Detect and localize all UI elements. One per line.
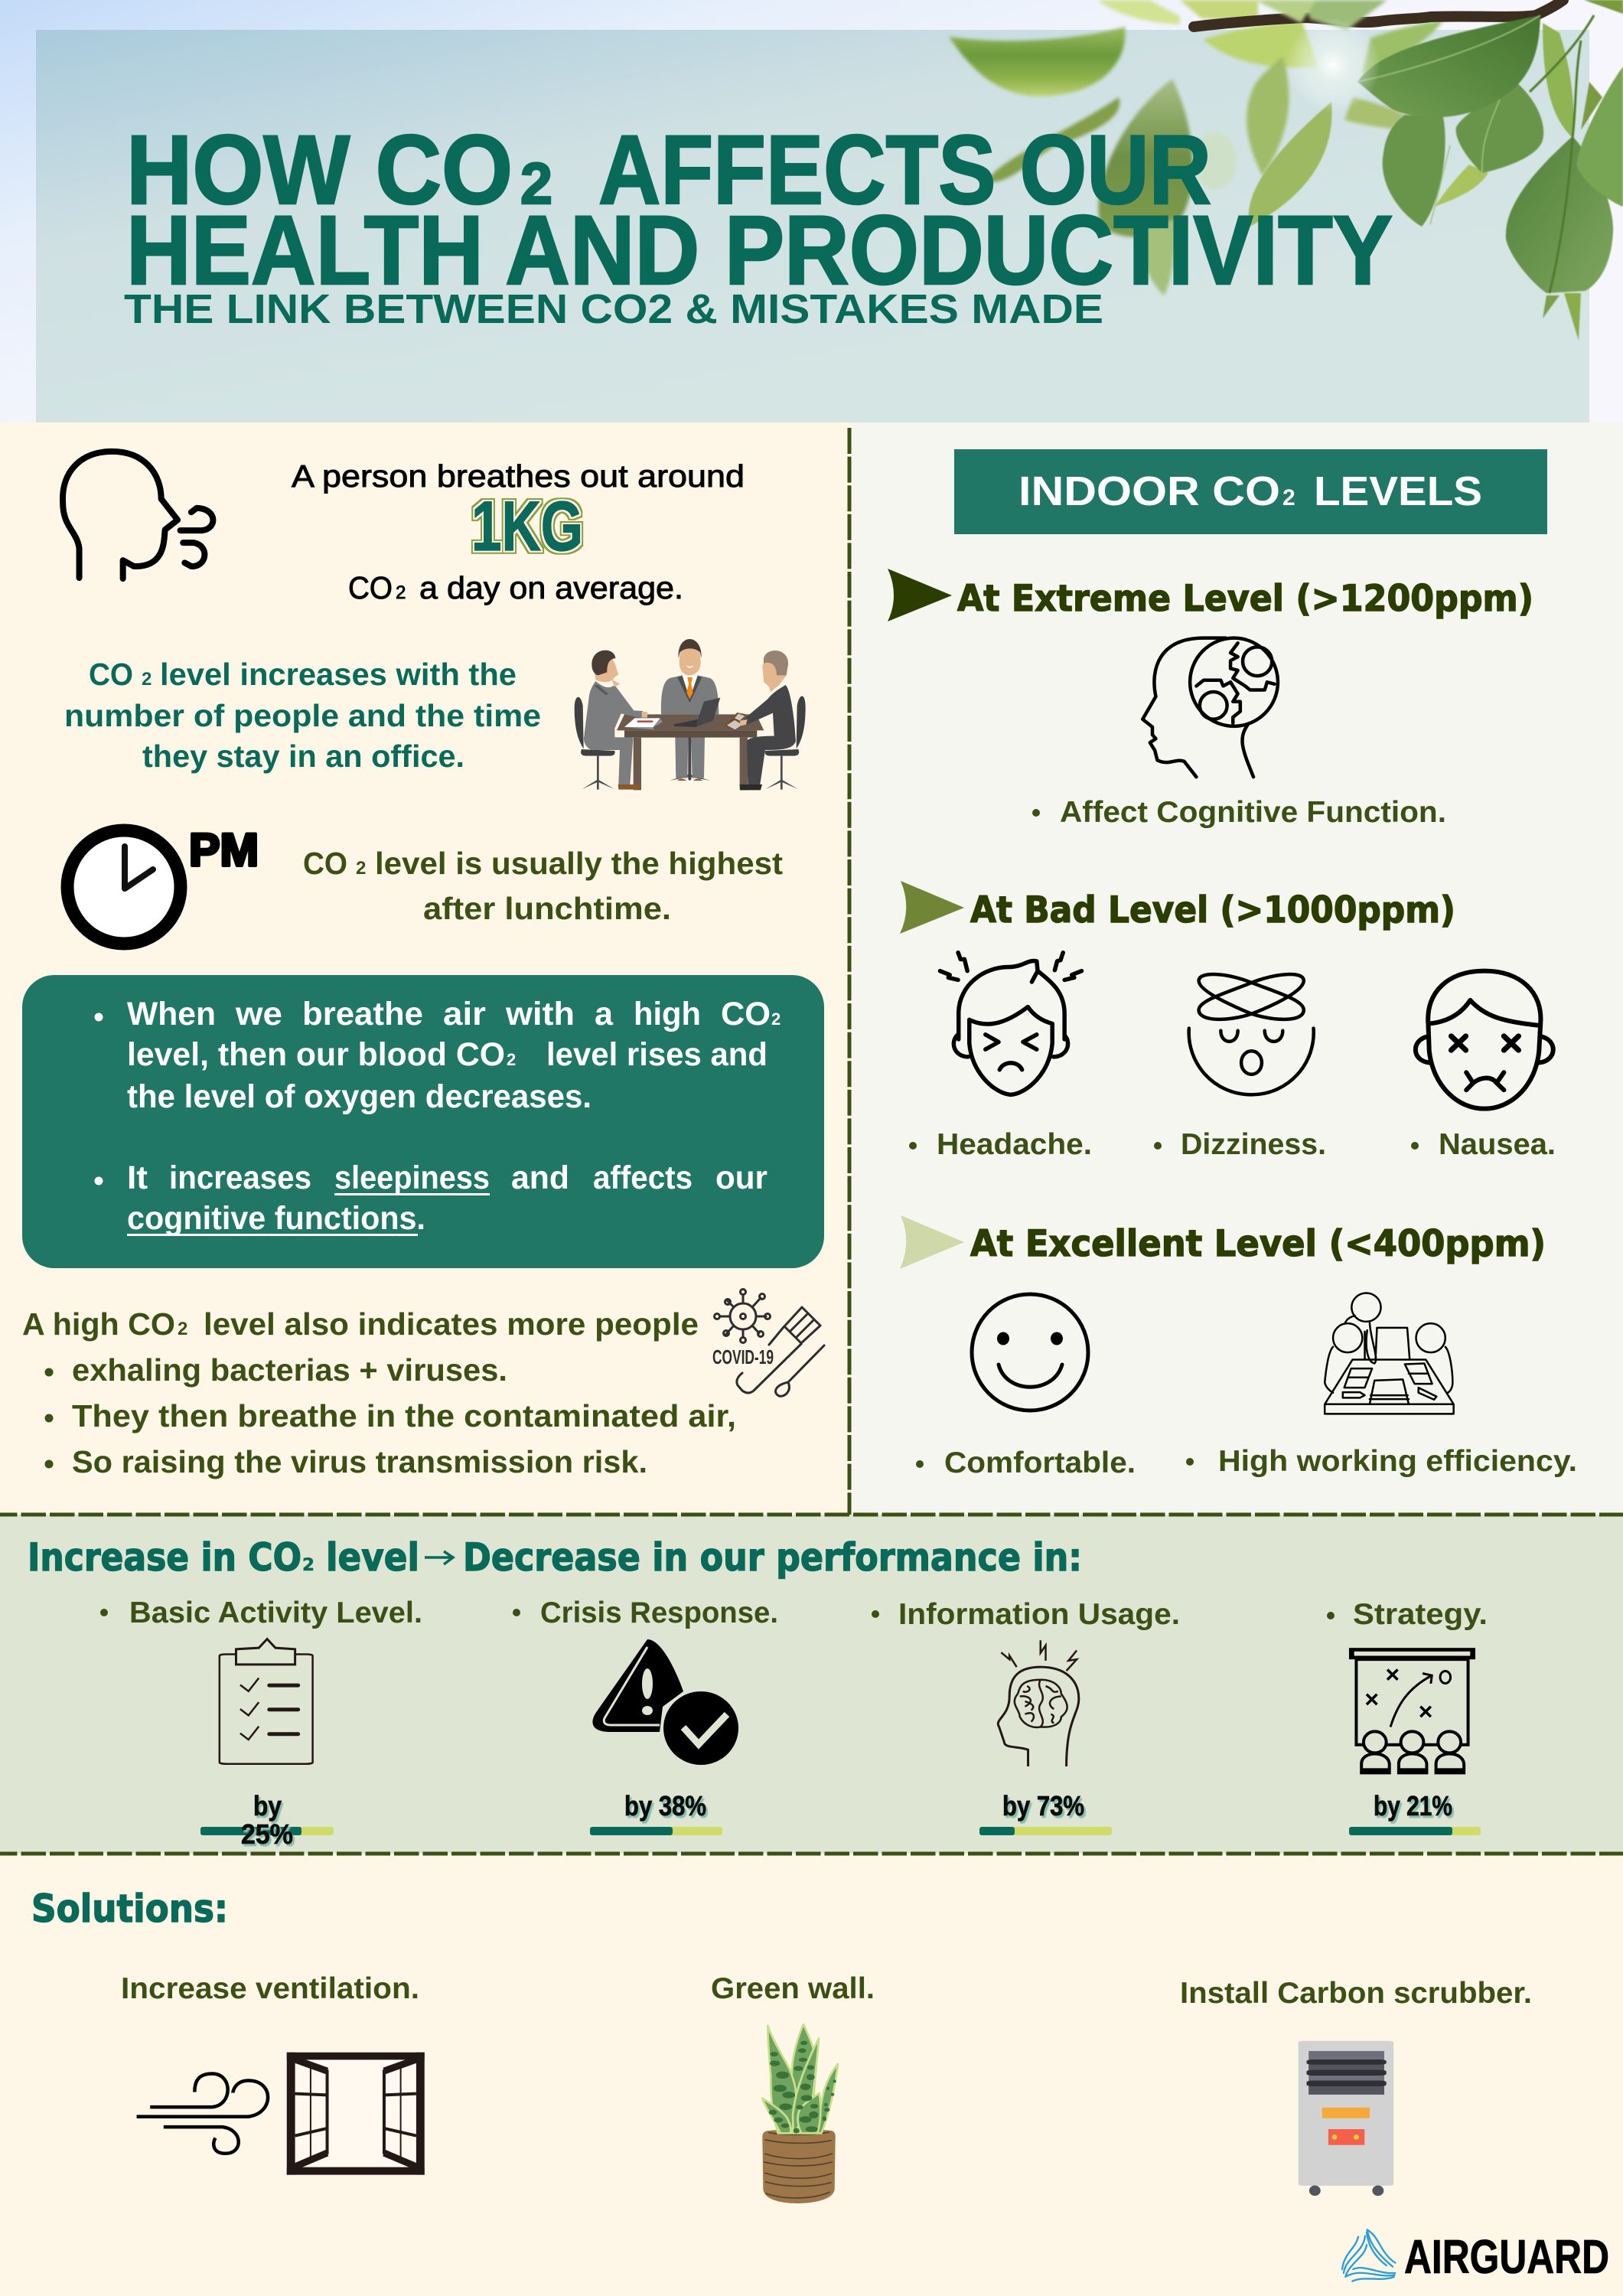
text: virus transmission: level also indicates more people	[204, 1306, 699, 1342]
callout: blood CO2 effects: air	[443, 996, 486, 1032]
labels: bad level symptoms: Dizziness.	[1181, 1128, 1326, 1161]
panel: left column facts	[0, 422, 849, 1515]
icon: head with gears	[1142, 638, 1278, 777]
bar: 73%	[979, 1790, 1112, 1835]
bar: 25%: by	[253, 1790, 282, 1821]
callout: blood CO2 effects: increases	[169, 1159, 311, 1196]
icon: covid-19 virus and swab: COVID-19	[712, 1345, 774, 1368]
panel: solutions	[0, 1856, 1623, 2296]
callout: blood CO2 effects: affects	[593, 1159, 693, 1196]
heading: extreme level: At Extreme Level (>1200ppm)	[957, 578, 1533, 620]
bar: 21%: by 21%	[1374, 1790, 1452, 1821]
text: virus transmission: So raising the virus transmission risk.	[72, 1444, 647, 1479]
callout: blood CO2 effects: CO	[721, 996, 771, 1032]
solution: increase ventilation: Increase ventilation.	[121, 1972, 419, 2005]
heading: indoor CO2 levels: INDOOR CO	[1018, 468, 1280, 514]
solution: carbon scrubber: Install Carbon scrubber.	[1180, 1977, 1532, 2010]
text: virus transmission: They then breathe in the contaminated air,	[72, 1398, 736, 1433]
text: highest after lunchtime: after lunchtime.	[423, 891, 671, 926]
title: HEALTH AND PRODUCTIVITY	[126, 196, 1393, 305]
bar: 38%: by 38%	[624, 1790, 706, 1821]
bar: 25%	[200, 1790, 334, 1850]
solution: carbon scrubber	[1180, 1977, 1532, 2196]
arrow: bad level	[900, 881, 964, 934]
illustration: three people meeting	[575, 639, 806, 790]
callout: blood CO2 effects: cognitive functions.	[127, 1200, 425, 1237]
text: level increases with people: they stay in an office.	[142, 739, 464, 774]
image: leafy branch	[949, 0, 1623, 341]
panel: performance decrease	[0, 1515, 1623, 1854]
callout: blood CO2 effects: our	[715, 1159, 768, 1196]
icon: smiley	[972, 1294, 1088, 1411]
solution: green wall: Green wall.	[711, 1972, 875, 2005]
icon: open window with wind	[137, 2053, 425, 2175]
icon: clock with PM: PM	[189, 824, 259, 876]
heading: increase in CO2 level: Decrease in our performance in:	[463, 1535, 1082, 1580]
title: AFFECTS OUR	[598, 116, 1211, 225]
callout: blood CO2 effects: we	[235, 996, 282, 1032]
heading: increase in CO2 level: Increase in CO	[28, 1535, 301, 1580]
bar: 21%	[1349, 1790, 1481, 1835]
icon: clock with PM	[67, 824, 259, 944]
icon: head breathing out	[63, 452, 213, 579]
text: level increases with people: 2	[142, 669, 152, 690]
figure: 1KG: 1KG	[471, 488, 583, 566]
callout: blood CO2 effects: sleepiness	[334, 1159, 490, 1196]
arrow: extreme level	[888, 569, 952, 621]
text: highest after lunchtime: level is usually the highest	[375, 846, 783, 881]
item: strategy	[1327, 1598, 1488, 1835]
icon: dizziness	[1189, 974, 1314, 1094]
callout: blood CO2 effects: the level of oxygen decreases.	[127, 1078, 592, 1115]
text: highest after lunchtime: CO	[303, 846, 347, 881]
callout: blood CO2 effects: level, then our blood CO	[127, 1036, 505, 1073]
callout: blood CO2 effects: with	[505, 996, 575, 1032]
icon: head with brain and lightning	[998, 1640, 1079, 1766]
callout: blood CO2 effects: It	[127, 1159, 148, 1196]
text: level increases with people: CO	[89, 657, 133, 692]
bar: 38%	[590, 1790, 722, 1835]
callout: blood CO2 effects: When	[127, 996, 216, 1032]
item: crisis response: Crisis Response.	[540, 1596, 778, 1629]
text: level increases with people	[64, 657, 541, 774]
right man	[744, 685, 796, 784]
text: virus transmission: A high CO	[22, 1306, 175, 1342]
text: virus transmission: exhaling bacterias + viruses.	[72, 1352, 507, 1388]
text: person breathes out: A person breathes out around	[292, 458, 745, 494]
text: level increases with people: number of people and the time	[64, 698, 541, 733]
callout: blood CO2 effects: 2	[771, 1009, 781, 1029]
item: basic activity level	[100, 1596, 422, 1850]
bar: 25%: 25%	[241, 1818, 293, 1850]
left man	[584, 681, 643, 784]
solution: increase ventilation	[121, 1972, 425, 2175]
text: person breathes out: 2	[396, 582, 406, 603]
icon: potted snake plant	[762, 2024, 838, 2203]
subtitle: THE LINK BETWEEN CO2 & MISTAKES MADE	[124, 286, 1103, 332]
callout: blood CO2 effects: 2	[507, 1050, 516, 1069]
text: virus transmission: 2	[178, 1319, 187, 1339]
callout: blood CO2 effects: level rises and	[546, 1036, 768, 1073]
callout: blood CO2 effects: high	[634, 996, 701, 1032]
callout: blood CO2 effects: breathe	[302, 996, 423, 1032]
icon: headache	[940, 953, 1081, 1094]
icon: nausea	[1416, 971, 1553, 1109]
heading: increase in CO2 level: 2	[302, 1556, 314, 1575]
text: person breathes out: CO	[348, 570, 393, 605]
labels: excellent level benefits: High working efficiency.	[1218, 1445, 1577, 1478]
text: virus transmission	[22, 1306, 736, 1479]
title	[126, 116, 1393, 305]
text: person breathes out: a day on average.	[419, 570, 683, 605]
labels: excellent level benefits	[916, 1445, 1577, 1479]
heading: increase in CO2 level: level	[326, 1535, 419, 1580]
heading: indoor CO2 levels: LEVELS	[1314, 468, 1482, 514]
panel: indoor CO2 levels	[852, 422, 1623, 1515]
text: person breathes out	[292, 458, 745, 605]
laptop, paper, tablet	[695, 698, 720, 727]
callout: blood CO2 effects: a	[595, 996, 614, 1032]
icon: warning with check	[592, 1639, 738, 1765]
item: information usage: Information Usage.	[898, 1598, 1180, 1631]
labels: bad level symptoms: Headache.	[937, 1128, 1092, 1161]
item: strategy: Strategy.	[1353, 1598, 1488, 1631]
centre man	[661, 675, 719, 714]
heading: bad level: At Bad Level (>1000ppm)	[970, 889, 1455, 931]
heading: excellent level: At Excellent Level (<400ppm)	[970, 1223, 1546, 1265]
text: highest after lunchtime: 2	[356, 858, 366, 879]
icon: clipboard checklist	[220, 1639, 313, 1764]
title: 2	[520, 152, 552, 217]
icon: scrubber unit	[1299, 2041, 1393, 2196]
title: HOW CO	[126, 116, 513, 225]
label: affect cognitive function: Affect Cognitive Function.	[1060, 796, 1446, 829]
callout: blood CO2 effects	[22, 975, 824, 1268]
table	[617, 714, 764, 730]
text: level increases with people: level increases with the	[160, 657, 517, 692]
heading: increase in CO2 level	[28, 1535, 1082, 1580]
heading: indoor CO2 levels	[954, 449, 1547, 534]
labels: bad level symptoms	[909, 1128, 1556, 1161]
labels: excellent level benefits: Comfortable.	[944, 1446, 1136, 1479]
item: information usage	[872, 1598, 1180, 1835]
callout: blood CO2 effects: and	[511, 1159, 569, 1196]
item: crisis response	[513, 1596, 778, 1835]
labels: bad level symptoms: Nausea.	[1439, 1128, 1556, 1161]
item: basic activity level: Basic Activity Level.	[129, 1596, 422, 1629]
arrow: excellent level	[900, 1215, 964, 1269]
heading: solutions: Solutions:	[31, 1887, 228, 1931]
bar: 73%: by 73%	[1002, 1790, 1084, 1821]
panel: header banner	[0, 0, 1623, 422]
icon: strategy board and team	[1349, 1648, 1475, 1773]
solution: green wall	[711, 1972, 875, 2203]
icon: covid-19 virus and swab	[712, 1289, 824, 1396]
heading: indoor CO2 levels: 2	[1282, 485, 1295, 510]
text: highest after lunchtime	[303, 846, 783, 926]
icon: team working at table	[1325, 1293, 1454, 1414]
